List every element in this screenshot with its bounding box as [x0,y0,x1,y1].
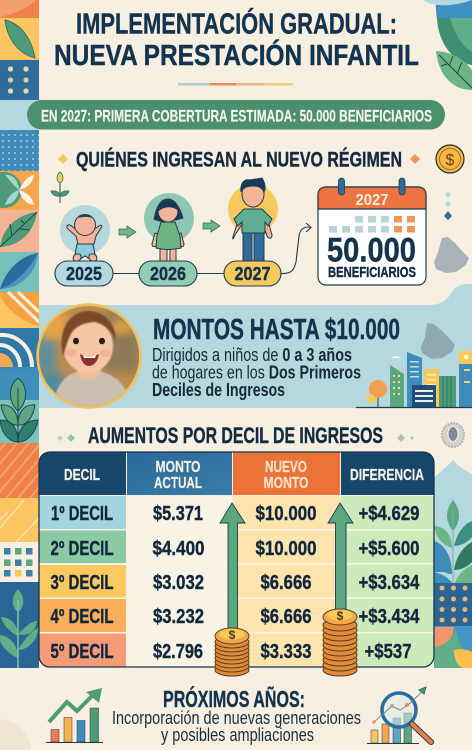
new amounts: $6.666 [260,572,312,594]
decile labels: 1º DECIL [51,503,113,525]
table column titles: DIFERENCIA [350,467,424,484]
panel: right lower decoration [434,460,472,668]
table column titles: MONTO [156,459,200,476]
icon: top right leaves [423,0,472,90]
differences: +$3.634 [358,572,420,594]
differences: +$4.629 [358,503,420,525]
icon: small sprout [51,172,69,203]
differences: +$537 [364,641,412,663]
table rows [39,496,434,667]
photo: smiling baby [36,304,140,410]
year pill 2025: 2025 [66,263,102,284]
differences: +$5.600 [358,538,420,560]
callout: 2027 coverage banner [27,100,445,130]
year pill 2025 [55,261,113,286]
year pill 2026 [139,261,197,286]
text: amounts description: de hogares en los Dos Primeros [152,362,361,382]
year pill 2027: 2027 [234,263,270,284]
table column titles [64,459,424,492]
icon: small coin stack: $ [229,628,236,642]
timeline figure: baby 2025 [60,205,110,261]
new amounts: $10.000 [256,503,316,525]
current amounts: $4.400 [152,538,204,560]
table column titles: DECIL [64,467,100,484]
corner shape [0,719,31,750]
heading: próximos años: PRÓXIMOS AÑOS: [163,685,305,712]
icon: small coin stack [215,628,249,676]
timeline figure: girl 2026 [144,193,194,261]
current amounts [152,503,204,663]
new amounts: $6.666 [260,606,312,628]
table column titles: ACTUAL [154,475,202,492]
arrow: current to new amount [220,503,245,630]
title: NUEVA PRESTACIÓN INFANTIL [54,40,419,72]
icon: Uruguay map silhouette [434,237,469,273]
title divider [178,83,293,86]
icon: seal [442,423,464,447]
decile labels: 4º DECIL [50,606,114,628]
illustration: city skyline [356,351,472,408]
panel: amounts band [36,284,472,410]
timeline figure: child 2027 [228,178,278,261]
icon: large coin stack [323,609,357,676]
text: amounts description: Deciles de Ingresos [152,380,285,400]
icon: growth chart [46,688,103,742]
icon: Uruguay map on band [421,323,455,359]
text: future plans: Incorporación de nuevas generaciones [112,708,361,728]
title [54,8,419,72]
current amounts: $2.796 [153,641,203,663]
icon: coin [436,145,464,173]
current amounts: $5.371 [153,503,203,525]
arrows between stages [119,220,220,238]
text: amounts description: Dirigidos a niños de 0 a 3 años [152,345,352,365]
current amounts: $3.032 [153,572,204,594]
differences [358,503,420,663]
year pill 2027 [224,261,281,286]
text: future plans [112,708,361,745]
calendar: 50.000 beneficiarios: 50.000 [327,232,416,270]
timeline connectors [113,223,311,274]
current amounts: $3.232 [153,606,204,628]
decile labels: 5º DECIL [50,641,114,663]
text: amounts description [152,345,361,400]
new amounts: $3.333 [260,641,312,663]
table header [39,452,434,495]
calendar: 50.000 beneficiarios: BENEFICIARIOS [328,264,416,281]
table: increases by income decile [39,452,434,667]
small diamonds [444,191,452,220]
text: future plans: y posibles ampliaciones [161,725,314,745]
arrow: new amount to difference [328,503,353,612]
calendar: 50.000 beneficiarios [318,178,426,285]
new amounts: $10.000 [256,538,316,560]
differences: +$3.434 [358,606,420,628]
calendar: 50.000 beneficiarios: 2027 [356,192,389,209]
icon: magnifier with chart [367,687,431,744]
new amounts [256,503,316,663]
year pill 2026: 2026 [150,263,186,284]
table column titles: MONTO [264,475,308,492]
decile labels: 3º DECIL [50,572,114,594]
decile labels: 2º DECIL [50,538,114,560]
icon: coin: $ [446,152,455,169]
table column titles: NUEVO [265,459,307,476]
icon: large coin stack: $ [337,609,344,623]
panel: left decorative strip [0,0,39,668]
decile labels [50,503,114,663]
